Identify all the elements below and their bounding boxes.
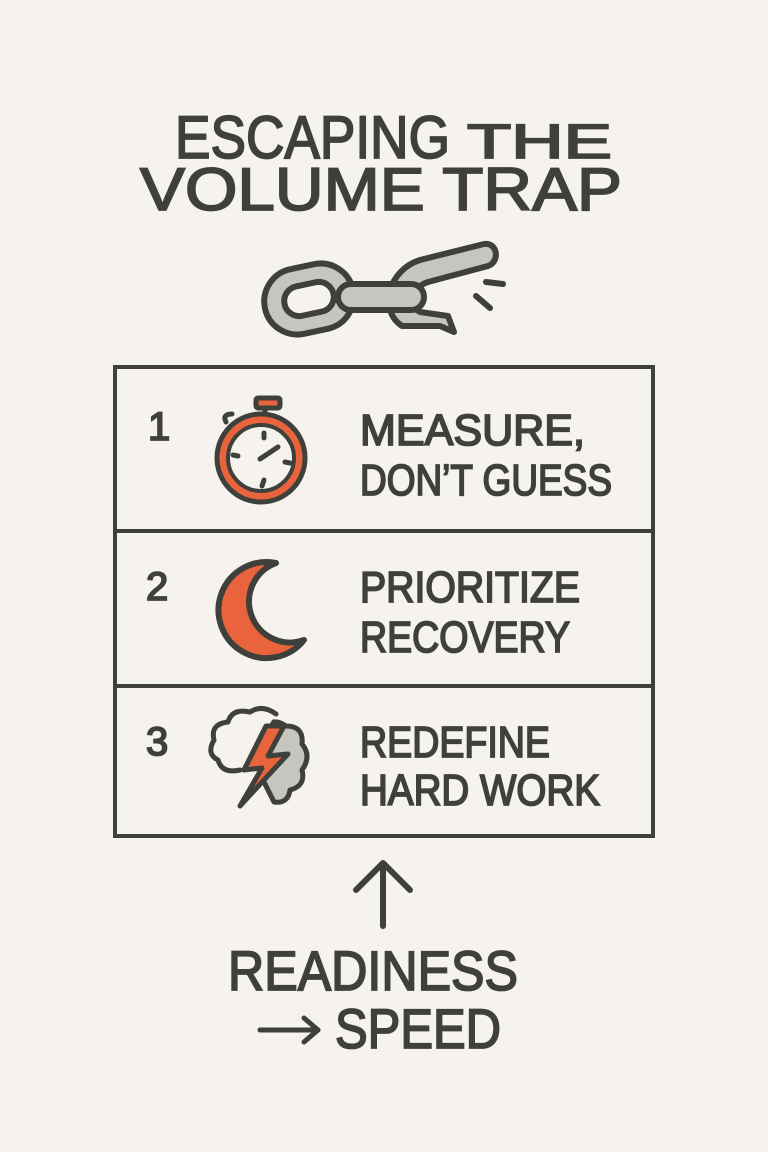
step 1: MEASURE, <box>360 406 585 455</box>
title <box>140 104 622 223</box>
panel: steps <box>115 367 653 836</box>
conclusion text: SPEED <box>335 997 501 1060</box>
step 2 <box>146 562 580 662</box>
step 1 <box>148 398 612 505</box>
icon: brain with lightning <box>211 708 307 806</box>
icon: stopwatch <box>217 398 305 502</box>
arrow: up <box>356 863 410 926</box>
conclusion text: READINESS <box>228 939 518 1002</box>
step 2: RECOVERY <box>360 613 570 662</box>
step 3: HARD WORK <box>360 766 600 815</box>
conclusion text <box>228 939 518 1060</box>
icon: broken chain <box>258 244 503 341</box>
step 2: PRIORITIZE <box>360 563 580 612</box>
step 1: DON’T GUESS <box>360 456 612 505</box>
step 1: 1 <box>148 405 170 449</box>
title: VOLUME TRAP <box>140 156 622 223</box>
title: ESCAPING <box>175 104 450 171</box>
title: THE <box>467 116 612 169</box>
step 2: 2 <box>146 565 168 609</box>
step 3: REDEFINE <box>360 718 550 767</box>
step 3 <box>146 708 600 815</box>
step 3: 3 <box>146 720 168 764</box>
icon: moon <box>218 562 304 658</box>
